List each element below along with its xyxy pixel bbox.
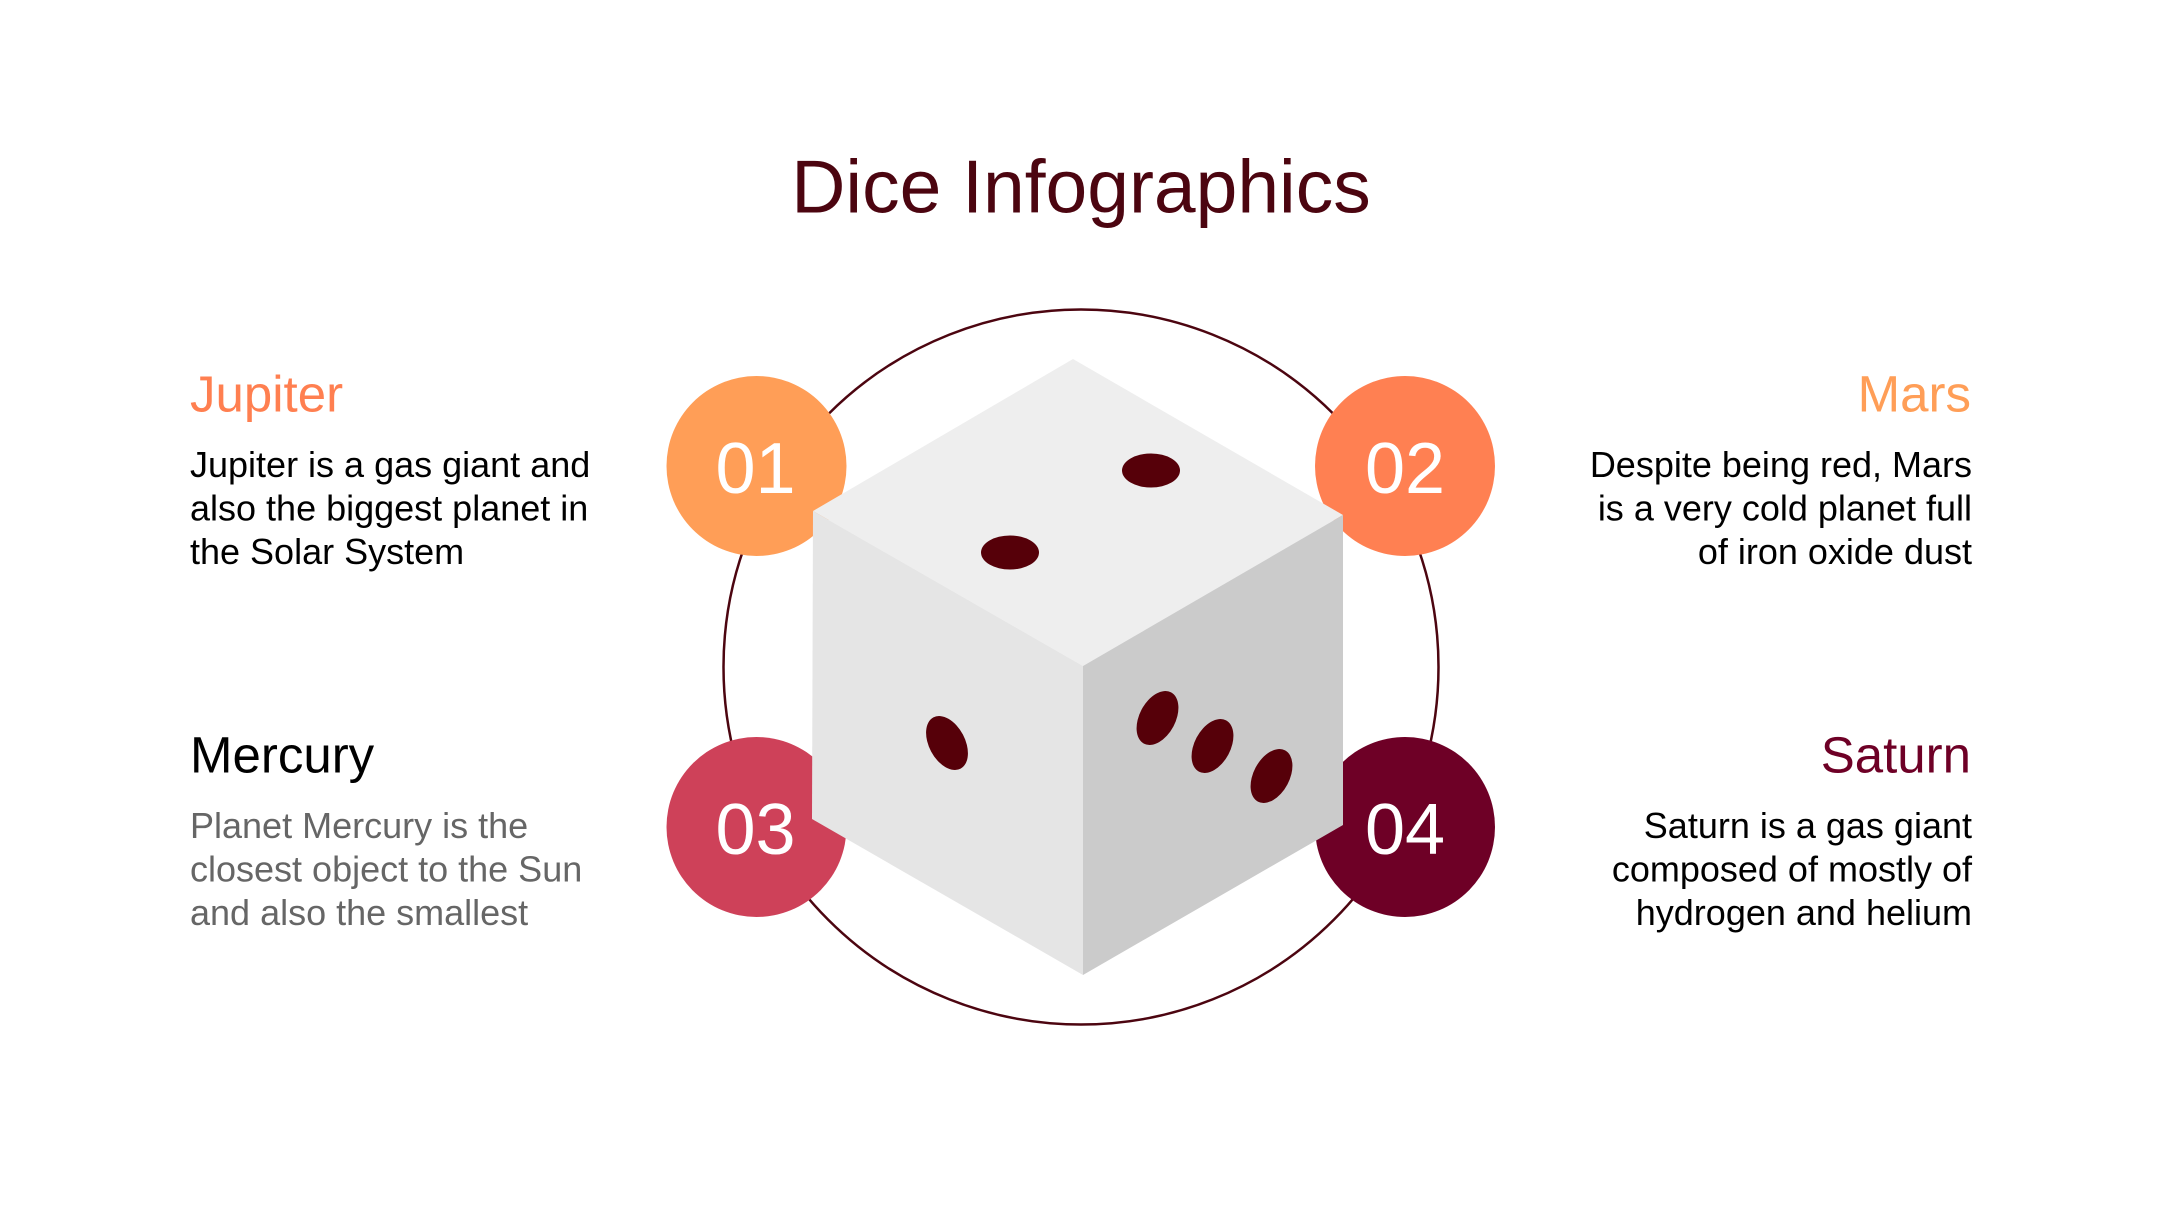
text block: Jupiter: also the biggest planet in: [190, 487, 588, 528]
text block: Jupiter: Jupiter: [190, 366, 343, 422]
dice top face: [813, 359, 1343, 666]
dice: [812, 359, 1343, 975]
title: Dice Infographics: [791, 144, 1371, 228]
text block: Saturn: Saturn is a gas giant: [1644, 805, 1972, 846]
text block: Mercury: and also the smallest: [190, 892, 528, 933]
badge 02: [1315, 376, 1495, 556]
dice right face: [1083, 515, 1343, 975]
text block: Saturn: [1612, 726, 1973, 933]
circle outline: [724, 310, 1438, 1024]
badge 01: [666, 376, 846, 556]
badge 03: 03: [715, 790, 796, 870]
text block: Jupiter: the Solar System: [190, 531, 464, 572]
badge 02: 02: [1365, 429, 1445, 509]
text block: Saturn: composed of mostly of: [1612, 848, 1973, 889]
text block: Jupiter: [190, 366, 590, 572]
text block: Saturn: Saturn: [1821, 726, 1971, 784]
right face pips: [1128, 684, 1301, 810]
text block: Mars: Mars: [1858, 366, 1971, 422]
text block: Mercury: Planet Mercury is the: [190, 805, 528, 846]
text block: Mars: of iron oxide dust: [1698, 531, 1972, 572]
text block: Saturn: hydrogen and helium: [1636, 892, 1972, 933]
text block: Mercury: [190, 726, 582, 933]
top face pips: [981, 454, 1180, 570]
text block: Mercury: closest object to the Sun: [190, 848, 582, 889]
left face pip: [917, 709, 977, 777]
text block: Mars: [1590, 366, 1972, 572]
badge 03: [666, 737, 846, 917]
text block: Mercury: Mercury: [190, 726, 375, 784]
badge 01: 01: [715, 429, 796, 509]
text block: Mars: Despite being red, Mars: [1590, 444, 1972, 485]
badge 04: 04: [1365, 790, 1445, 870]
text block: Mars: is a very cold planet full: [1598, 487, 1972, 528]
dice left face: [812, 511, 1083, 975]
text block: Jupiter: Jupiter is a gas giant and: [190, 444, 590, 485]
badge 04: [1315, 737, 1495, 917]
